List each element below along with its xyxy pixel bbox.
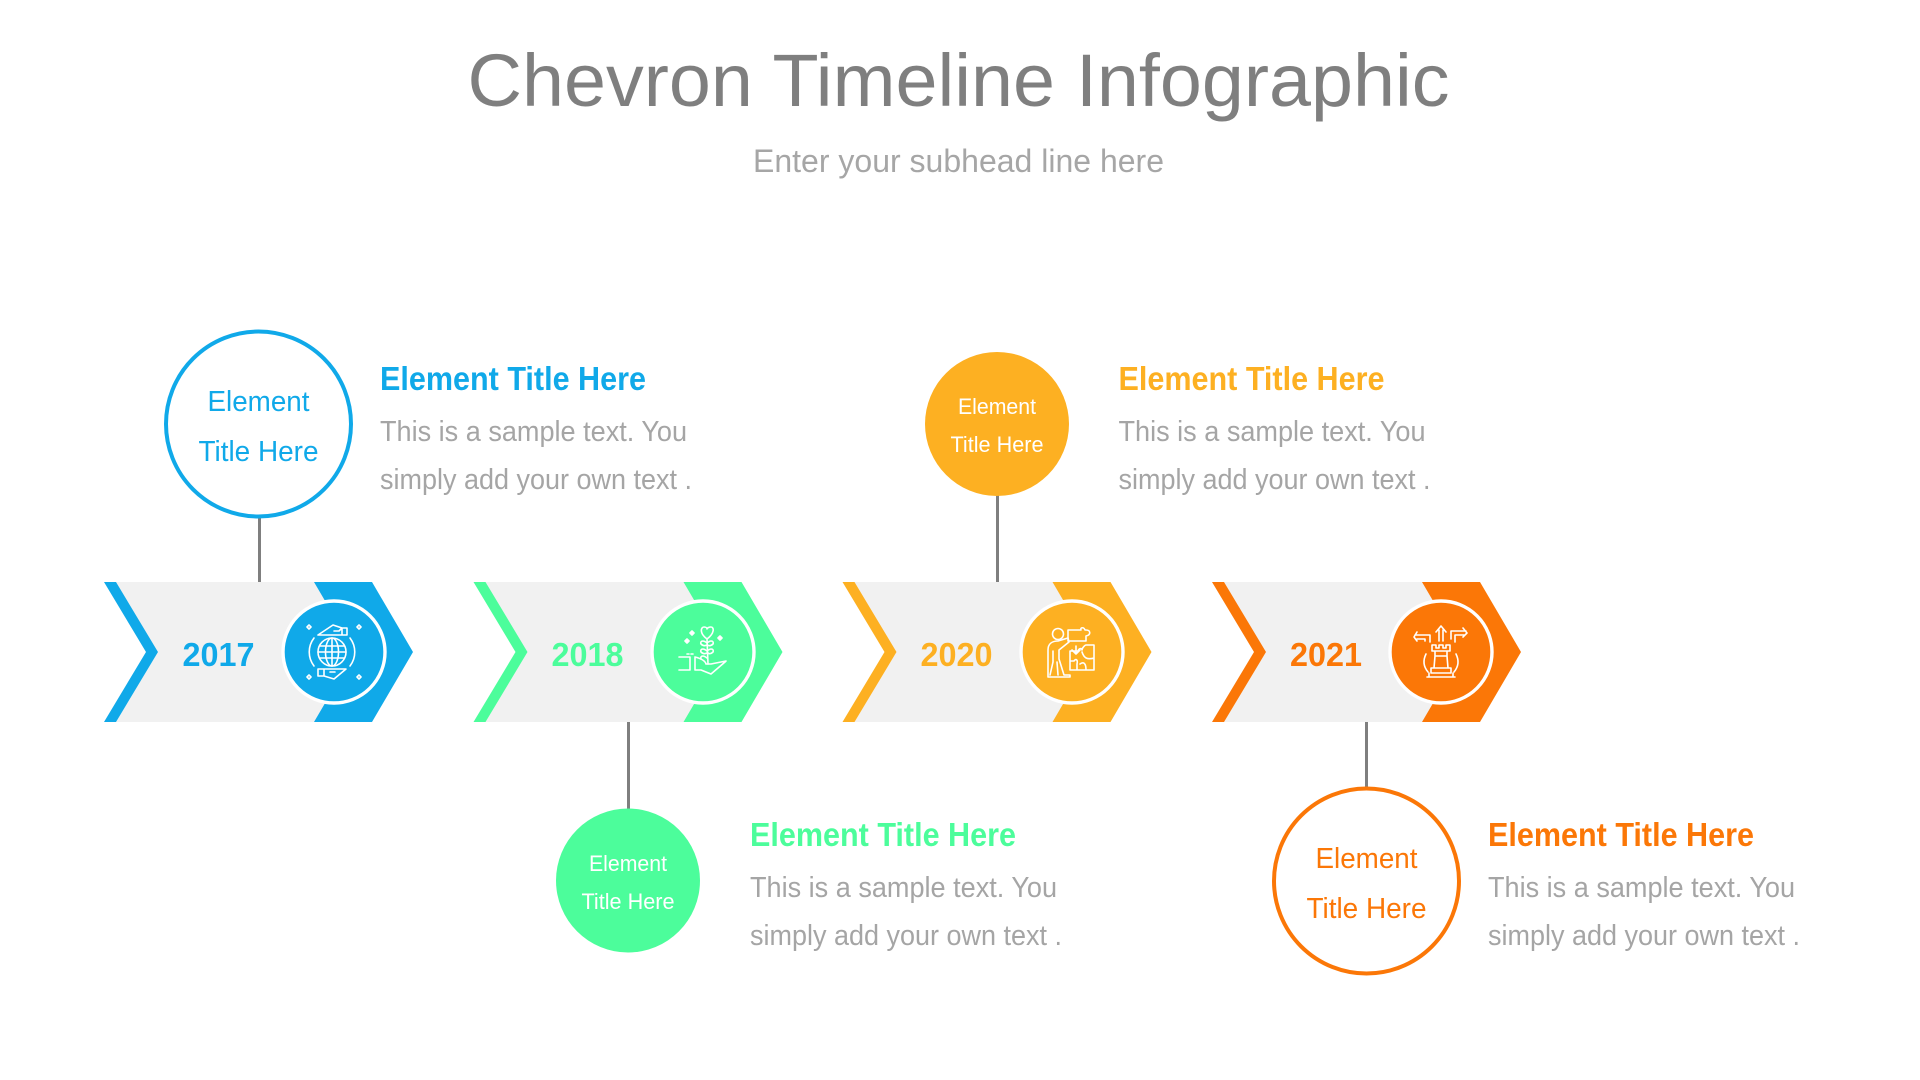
panel: element 1 [166,332,692,516]
filled circle: element 2 [556,808,700,952]
filled circle: element 3: Element [958,394,1036,419]
connector: 2021 [1365,722,1368,788]
heading: element 1: Element Title Here [380,360,646,397]
filled circle: element 3 [925,352,1069,496]
body: element 2: This is a sample text. You [750,872,1057,904]
outlined circle: element 1: Title Here [198,436,318,468]
outlined circle: element 4 [1274,788,1459,974]
year: 2020: 2020 [920,636,992,673]
body: element 3: simply add your own text . [1118,464,1430,496]
subhead: Enter your subhead line here [753,143,1164,179]
body: element 4 [1488,872,1800,952]
icon: globe in hands [283,601,385,703]
body: element 4: This is a sample text. You [1488,872,1795,904]
icon: plant in hand [652,601,754,703]
year: 2017: 2017 [182,636,254,673]
filled circle: element 2: Element [589,851,667,876]
filled circle: element 2: Title Here [582,889,674,914]
heading: element 4: Element Title Here [1488,816,1754,853]
panel: element 3 [925,352,1430,496]
icon: chess rook with arrows [1390,601,1492,703]
body: element 2: simply add your own text . [750,920,1062,952]
body: element 4: simply add your own text . [1488,920,1800,952]
body: element 1: simply add your own text . [380,464,692,496]
chevron: 2017 [104,582,413,722]
body: element 1: This is a sample text. You [380,416,687,448]
outlined circle: element 1: Element [208,386,310,418]
outlined circle: element 1 [166,332,351,516]
chevron: 2021 [1212,582,1521,722]
outlined circle: element 4: Title Here [1306,893,1426,925]
panel: element 4 [1274,788,1800,974]
filled circle: element 3: Title Here [950,432,1044,457]
chevron: 2020 [842,582,1152,722]
chevron: 2018 [474,582,782,722]
body: element 2 [750,872,1062,952]
body: element 1 [380,416,692,496]
connector: 2017 [258,516,261,582]
year: 2018: 2018 [552,636,624,673]
heading: element 2: Element Title Here [750,816,1016,853]
body: element 3 [1118,416,1430,496]
panel: element 2 [556,808,1062,952]
title: Chevron Timeline Infographic [468,39,1450,122]
heading: element 3: Element Title Here [1118,360,1384,397]
connector: 2018 [627,722,630,809]
outlined circle: element 4: Element [1316,843,1418,875]
icon: person with puzzle [1021,601,1123,703]
connector: 2020 [996,494,999,582]
year: 2021: 2021 [1290,636,1362,673]
body: element 3: This is a sample text. You [1118,416,1426,448]
